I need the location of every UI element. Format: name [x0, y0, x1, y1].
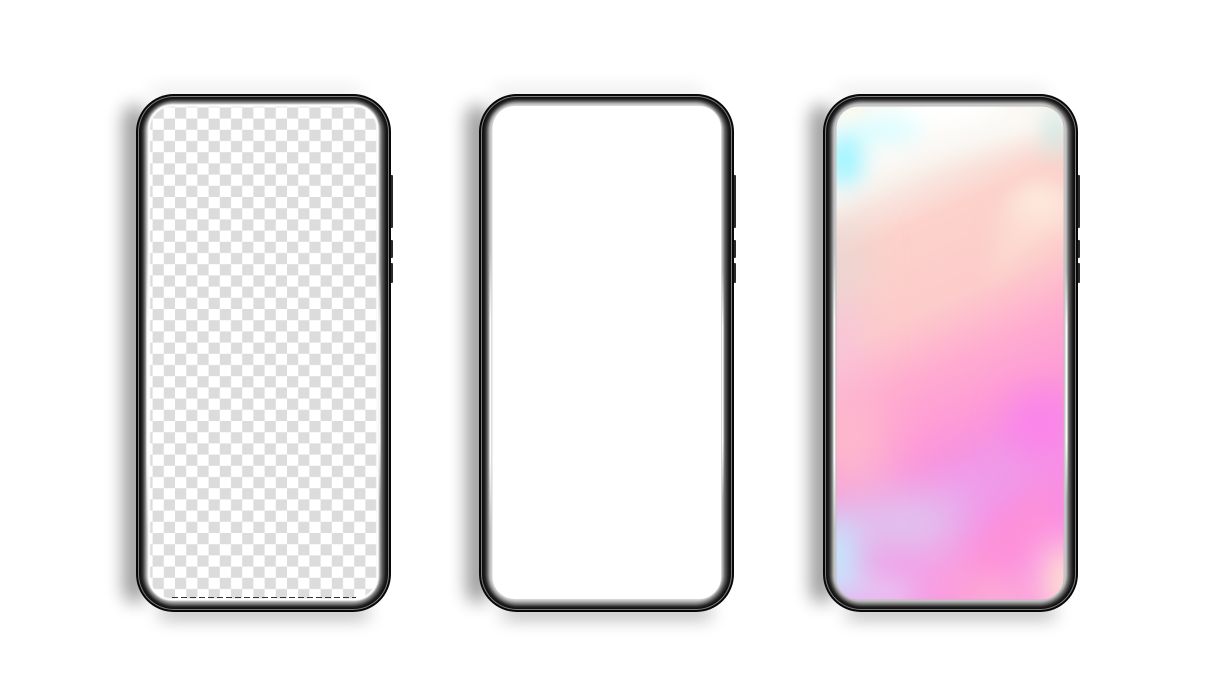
panel: phone with blank white screen [467, 88, 736, 618]
phone body and bezel [811, 88, 1080, 618]
screen outline [492, 106, 722, 600]
panel: phone with transparent checker screen [124, 88, 393, 618]
panel: phone with pastel gradient screen [808, 86, 1090, 622]
dashed bottom edge [172, 596, 356, 598]
gradient screen [836, 106, 1064, 600]
screen outline [836, 106, 1064, 600]
checkerboard screen [149, 106, 378, 600]
screen edge highlight [149, 106, 378, 600]
white screen [492, 106, 722, 600]
phone body and bezel [467, 88, 736, 618]
phone body and bezel [124, 88, 393, 618]
